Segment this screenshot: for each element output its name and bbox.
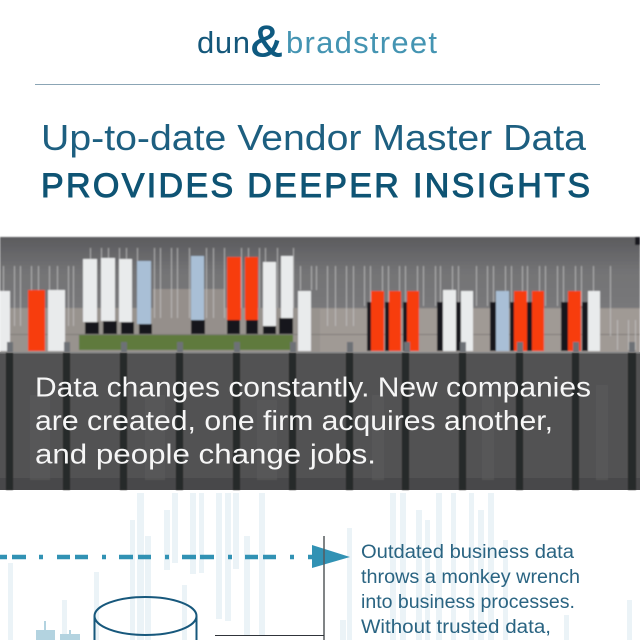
title: PROVIDES DEEPER INSIGHTS (41, 167, 590, 205)
red trailers (28, 257, 581, 351)
logo: dun & bradstreet: bradstreet (286, 25, 437, 60)
green planting strip (79, 335, 293, 350)
logo: dun & bradstreet: & (251, 17, 282, 66)
arrow: dashed timeline (0, 545, 350, 568)
intro text (35, 372, 591, 470)
callout text: outdated business data: Outdated business data (361, 542, 574, 563)
icon: database cylinder (94, 597, 196, 640)
callout text: outdated business data: throws a monkey wrench (361, 567, 580, 588)
title: Up-to-date Vendor Master Data (41, 117, 587, 158)
callout text: outdated business data: Without trusted data, (361, 617, 551, 638)
blue trailers (137, 256, 509, 351)
icon: small skyline buildings (36, 621, 80, 640)
intro text: are created, one firm acquires another, (35, 405, 553, 436)
intro text: Data changes constantly. New companies (35, 372, 591, 402)
photo: aerial view of truck loading dock (0, 237, 640, 353)
white trailers (0, 256, 600, 351)
truck cabs and shadows (85, 237, 640, 351)
intro text: and people change jobs. (35, 438, 376, 470)
dock lamp posts (7, 342, 635, 352)
connector lines (215, 536, 324, 640)
callout text: outdated business data: into business processes. (361, 592, 575, 613)
title (41, 117, 590, 205)
parking lines (3, 248, 636, 350)
panel: dark intro band (0, 352, 640, 490)
logo: dun & bradstreet (197, 17, 437, 66)
chart: pale background bars (8, 493, 632, 640)
concrete apron (0, 289, 640, 352)
logo: dun & bradstreet: dun (197, 25, 250, 60)
callout text: outdated business data (361, 542, 580, 638)
